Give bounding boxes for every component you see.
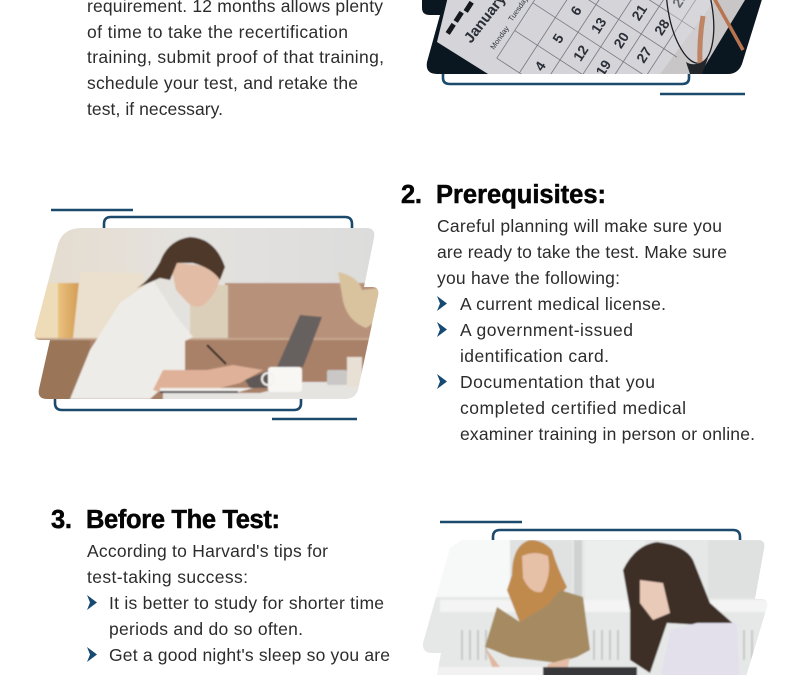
calendar dates: 28 [651,16,673,38]
text block: section 1 recertification timing: training, submit proof of that training, [87,47,384,67]
photo: calendar and glasses [422,0,762,96]
list: prerequisites: identification card. [460,346,609,366]
list: test-taking tips [87,593,390,665]
text block: prerequisites intro: you have the following: [437,268,620,288]
text block: prerequisites intro: are ready to take the test. Make sure [437,242,727,262]
text block: section 1 recertification timing: schedule your test, and retake the [87,73,358,93]
photo: two women studying [415,522,775,675]
table [163,382,360,402]
heading: 3. Before The Test: 3. [51,506,72,534]
woman's forearm [153,365,263,392]
text block: before the test intro: test-taking success: [87,567,248,587]
right woman's hair [623,542,737,673]
left woman's face [522,553,549,592]
heading: 2. Prerequisites: 2. [401,181,422,209]
woman's face [170,262,222,307]
list: test-taking tips: Get a good night's sleep so you are [109,645,390,665]
right woman's t-shirt [692,622,738,660]
left woman's blouse [485,590,590,663]
text block: before the test intro: According to Harvard's tips for [87,541,328,561]
decorative bracket under calendar [443,74,689,84]
photo: woman writing at laptop [30,210,385,419]
laptop [277,315,322,367]
heading: 2. Prerequisites: Prerequisites: [436,181,606,209]
text block: prerequisites intro [437,216,727,288]
icon: bullet arrow [437,322,447,337]
heading: 3. Before The Test: Before The Test: [86,506,280,534]
text block: before the test intro [87,541,328,587]
calendar dates: 4 [531,58,549,74]
list: prerequisites: A government-issued [460,320,633,340]
icon: bullet arrow [437,374,447,389]
text block: section 1 recertification timing [87,0,384,119]
calendar dates: 6 [567,3,585,18]
woman's shirt [70,280,193,399]
calendar dates: 13 [588,14,610,36]
list: prerequisites: A current medical license. [460,294,666,314]
calendar dates: 20 [610,29,632,51]
list: prerequisites: examiner training in person or online. [460,424,755,444]
mug [268,367,302,392]
photo: calendar and glasses: Monday [488,24,511,51]
list: prerequisites: completed certified medical [460,398,686,418]
calendar dates: 19 [592,57,614,79]
calendar dates: 21 [628,1,650,23]
icon: bullet arrow [87,647,97,662]
right woman's face [640,580,670,620]
list: prerequisites: Documentation that you [460,372,655,392]
calendar dates: 5 [549,31,567,46]
text block: section 1 recertification timing: of time to take the recertification [87,22,348,42]
left woman's hair [507,540,567,623]
text block: prerequisites intro: Careful planning will make sure you [437,216,722,236]
calendar dates [536,0,686,74]
icon: bullet arrow [437,296,447,311]
list: prerequisites [437,294,755,444]
table [435,667,543,675]
calendar dates: 12 [570,42,592,64]
text block: section 1 recertification timing: test, if necessary. [87,99,223,119]
icon: bullet arrow [87,595,97,610]
woman's hair [137,237,225,288]
list: test-taking tips: It is better to study for shorter time [109,593,384,613]
list: test-taking tips: periods and do so often. [109,619,303,639]
calendar dates: 27 [633,44,655,66]
